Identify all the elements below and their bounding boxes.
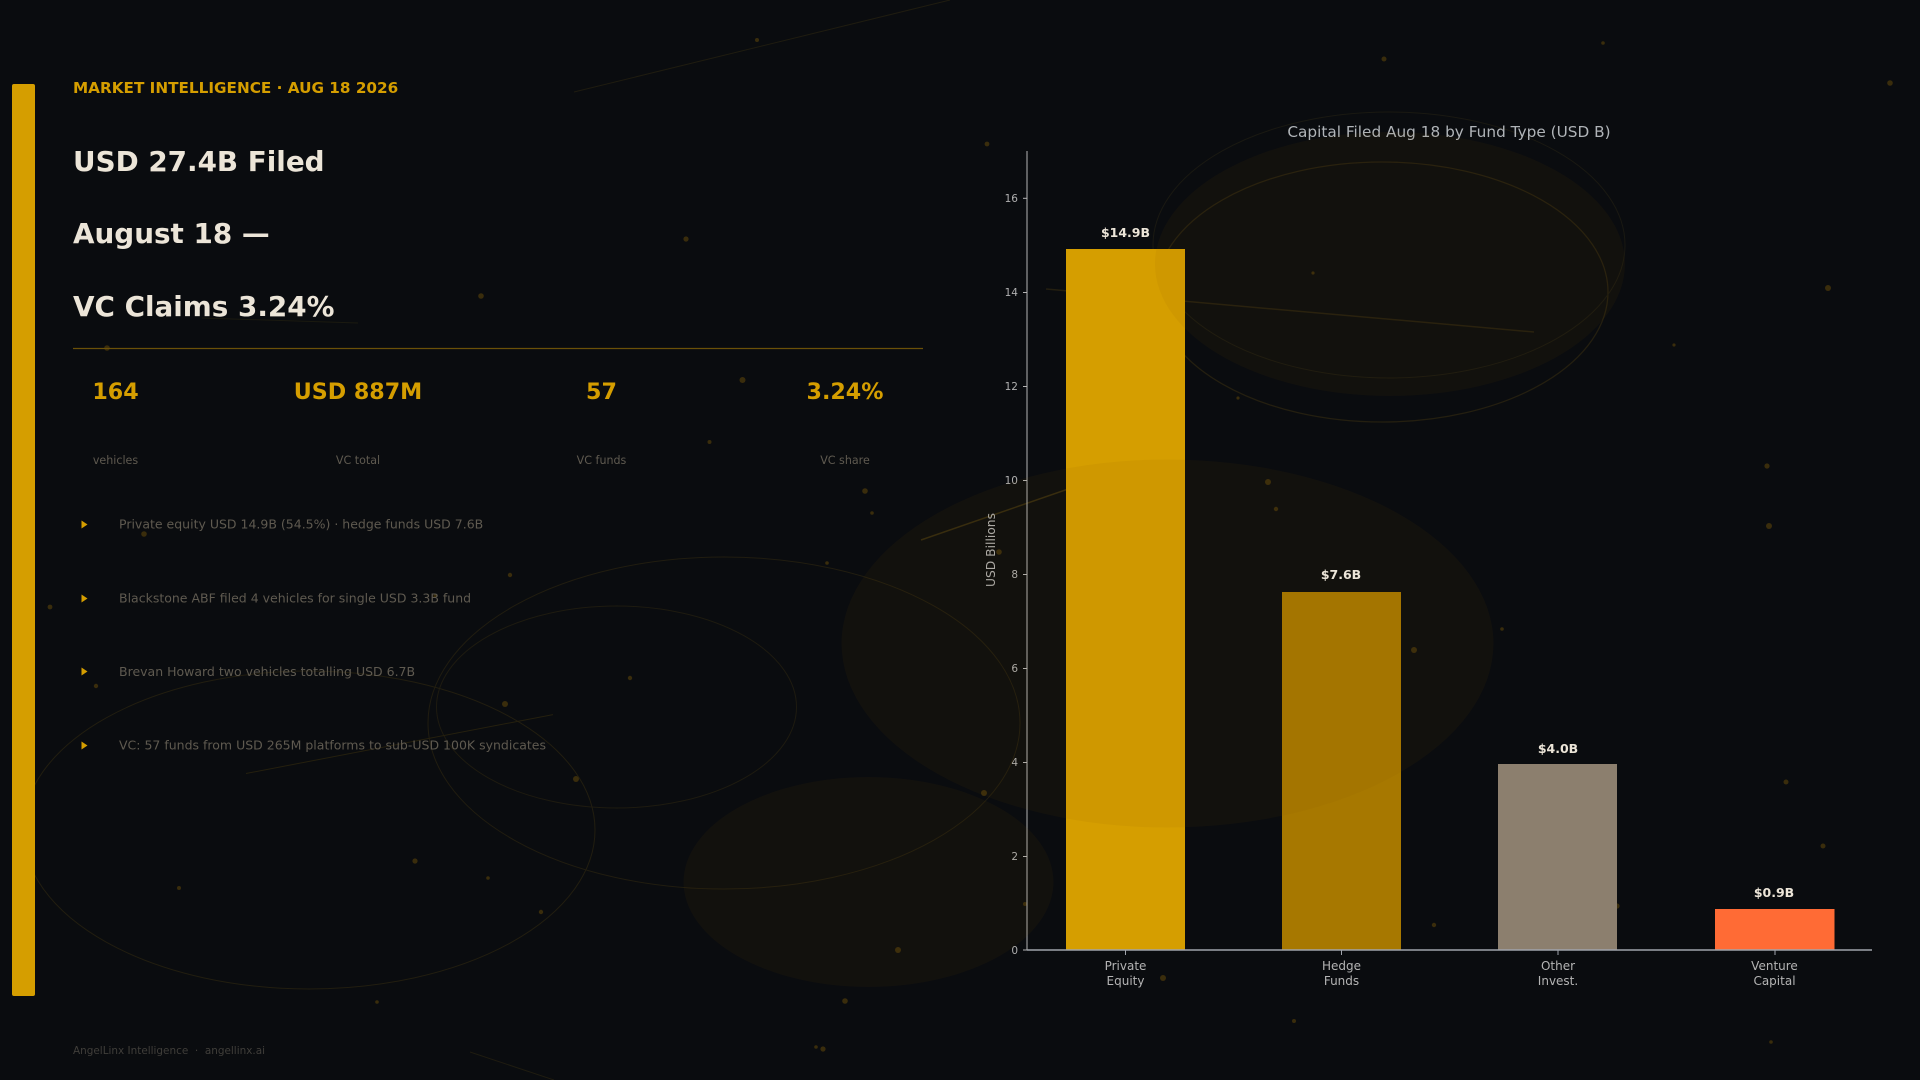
bar value labels: $0.9B: [1754, 885, 1794, 900]
bar chart: [984, 123, 1872, 957]
bar value labels: $7.6B: [1321, 567, 1361, 582]
background glow ellipses: [684, 132, 1625, 987]
stat: VC funds: 57: [586, 379, 617, 405]
y axis: 4: [1011, 757, 1018, 769]
stat: VC share: [807, 379, 883, 467]
title: August 18 —: [73, 217, 270, 250]
divider: [73, 348, 923, 350]
bar value labels: $4.0B: [1538, 741, 1578, 756]
title: [73, 145, 334, 323]
stats row: [92, 379, 883, 467]
stat: VC share: 3.24%: [807, 379, 883, 405]
y axis: 6: [1011, 663, 1018, 675]
y axis: 16: [1005, 193, 1018, 205]
stat: VC share: VC share: [820, 454, 870, 467]
stat: vehicles: [92, 379, 139, 467]
bullet 1: Private equity USD 14.9B (54.5%) · hedge funds USD 7.6B: [119, 516, 483, 532]
kicker: MARKET INTELLIGENCE · AUG 18 2026: [73, 79, 398, 97]
x category labels: Private: [1105, 959, 1146, 973]
y axis: 12: [1005, 381, 1018, 393]
y axis label: USD Billions: [984, 513, 998, 587]
stat: VC funds: [577, 379, 627, 467]
stat: VC total: [294, 379, 422, 467]
footer: AngelLinx Intelligence · angellinx.ai: [73, 1045, 265, 1057]
bar: private equity: [1066, 249, 1185, 950]
stat: VC total: USD 887M: [294, 379, 422, 405]
stat: vehicles: 164: [92, 379, 139, 405]
x category labels: Funds: [1324, 974, 1359, 988]
stat: VC funds: VC funds: [577, 454, 627, 467]
y axis: [1005, 151, 1027, 957]
x category labels: [1105, 959, 1798, 988]
stat: vehicles: vehicles: [93, 454, 138, 467]
bar: hedge funds: [1282, 592, 1401, 950]
chart title: Capital Filed Aug 18 by Fund Type (USD B): [1287, 123, 1611, 141]
bullet 2: Blackstone ABF filed 4 vehicles for single USD 3.3B fund: [119, 590, 471, 606]
bar: other invest: [1498, 764, 1617, 950]
y axis: 2: [1011, 851, 1018, 863]
x category labels: Venture: [1751, 959, 1798, 973]
y axis: 14: [1005, 287, 1018, 299]
bars: [1066, 249, 1834, 950]
x category labels: Other: [1541, 959, 1575, 973]
bar value labels: [1101, 225, 1794, 900]
stat: VC total: VC total: [336, 454, 380, 467]
x axis: [1027, 950, 1872, 955]
x category labels: Invest.: [1538, 974, 1578, 988]
x category labels: Capital: [1753, 974, 1796, 988]
y axis: 8: [1011, 569, 1018, 581]
bullet list: [82, 516, 546, 752]
x category labels: Hedge: [1322, 959, 1361, 973]
title: USD 27.4B Filed: [73, 145, 325, 178]
bar value labels: $14.9B: [1101, 225, 1150, 240]
title: VC Claims 3.24%: [73, 290, 334, 323]
accent sidebar: [12, 84, 35, 996]
bar: venture capital: [1715, 909, 1834, 950]
y axis: 10: [1005, 475, 1018, 487]
bullet 4: VC: 57 funds from USD 265M platforms to sub-USD 100K syndicates: [119, 738, 546, 752]
y axis: 0: [1011, 945, 1018, 957]
x category labels: Equity: [1107, 974, 1144, 988]
bullet 3: Brevan Howard two vehicles totalling USD 6.7B: [119, 664, 415, 679]
